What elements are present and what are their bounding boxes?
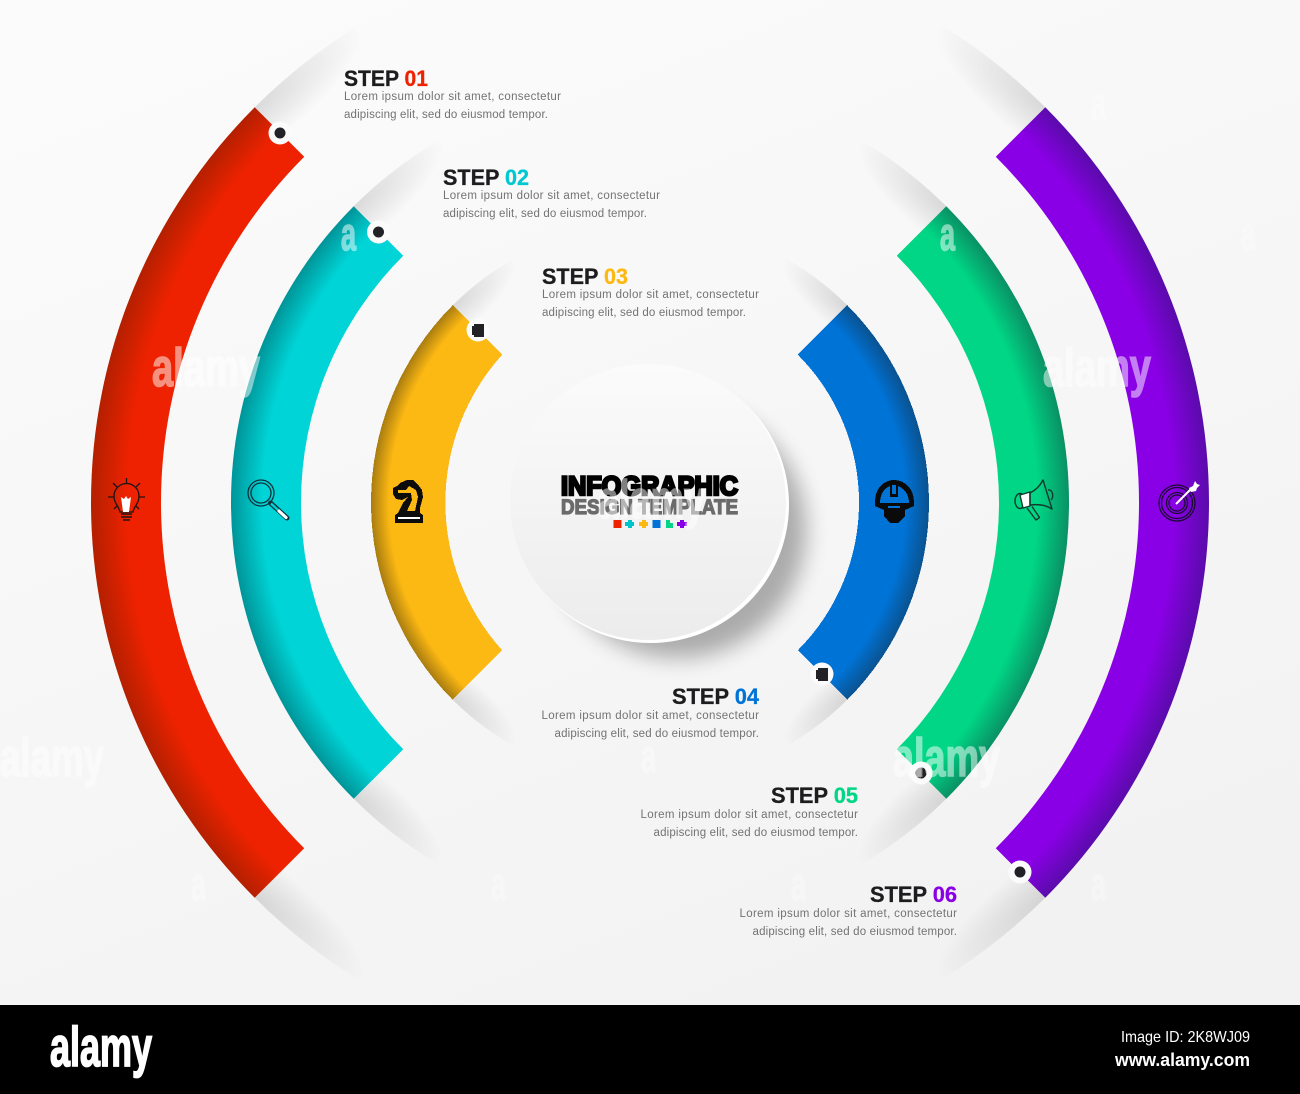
step 06 text: adipiscing elit, sed do eiusmod tempor. [752, 926, 957, 938]
step 04 text: Lorem ipsum dolor sit amet, consectetur [542, 710, 759, 722]
step 03 text [542, 264, 759, 319]
step 01 text [344, 66, 561, 121]
step 02 text: Lorem ipsum dolor sit amet, consectetur [443, 190, 660, 202]
stock watermarks: alamy [598, 470, 705, 530]
stock watermarks: alamy [152, 338, 260, 398]
stock watermarks: alamy [893, 728, 1000, 788]
stock watermarks: a [491, 858, 506, 910]
icon: light bulb [108, 478, 145, 520]
stock watermarks: a [641, 730, 656, 782]
icon: megaphone [1015, 480, 1053, 520]
step 04 text: STEP 04 [672, 684, 759, 709]
panel: step 06 arc [857, 0, 1209, 1009]
stock watermarks: a [191, 858, 206, 910]
step 01 text: STEP 01 [344, 66, 428, 91]
step 03 text: adipiscing elit, sed do eiusmod tempor. [542, 307, 746, 319]
stock watermarks: a [1091, 78, 1106, 130]
stock watermarks [0, 78, 1256, 910]
panel: step 05 arc [798, 123, 1069, 882]
step 02 text: adipiscing elit, sed do eiusmod tempor. [443, 208, 647, 220]
stock watermarks: a [341, 208, 356, 260]
step 05 text: Lorem ipsum dolor sit amet, consectetur [640, 809, 858, 821]
icon: helmet [875, 480, 914, 523]
icon: chess knight [393, 480, 423, 523]
step 02 text: STEP 02 [443, 165, 529, 190]
step 01 text: adipiscing elit, sed do eiusmod tempor. [344, 109, 548, 121]
panel: step 02 arc [231, 123, 502, 882]
footer logo: alamy [50, 1015, 152, 1078]
footer bar [0, 1005, 1300, 1094]
step 02 text [443, 165, 660, 220]
panel: centre disc [510, 364, 806, 658]
footer url: www.alamy.com [1114, 1050, 1250, 1070]
step 04 text: adipiscing elit, sed do eiusmod tempor. [554, 728, 759, 740]
stock watermarks: a [940, 208, 955, 260]
step 05 text: adipiscing elit, sed do eiusmod tempor. [654, 827, 858, 839]
step 05 text [640, 783, 858, 839]
centre subheading: DESIGN TEMPLATE [561, 495, 738, 519]
step 03 text: Lorem ipsum dolor sit amet, consectetur [542, 289, 759, 301]
step 06 text [740, 882, 957, 938]
stock watermarks: a [1241, 208, 1256, 260]
panel: step 04 arc [738, 250, 929, 755]
step 04 text [542, 684, 759, 740]
stock watermarks: a [1091, 858, 1106, 910]
icon: magnifier [248, 480, 287, 518]
step 06 text: STEP 06 [870, 882, 957, 907]
step 01 text: Lorem ipsum dolor sit amet, consectetur [344, 91, 561, 103]
centre heading: INFOGRAPHIC [561, 471, 738, 501]
step 06 text: Lorem ipsum dolor sit amet, consectetur [740, 908, 957, 920]
colour key markers [614, 520, 687, 528]
step 05 text: STEP 05 [771, 783, 858, 808]
step 03 text: STEP 03 [542, 264, 628, 289]
panel: step 01 arc [91, 0, 443, 1009]
stock watermarks: alamy [1043, 338, 1151, 398]
image id: Image ID: 2K8WJ09 [1121, 1029, 1250, 1046]
panel: step 03 arc [371, 250, 562, 755]
stock watermarks: alamy [0, 728, 104, 788]
icon: target with dart [1159, 481, 1200, 521]
stock watermarks: a [791, 858, 806, 910]
